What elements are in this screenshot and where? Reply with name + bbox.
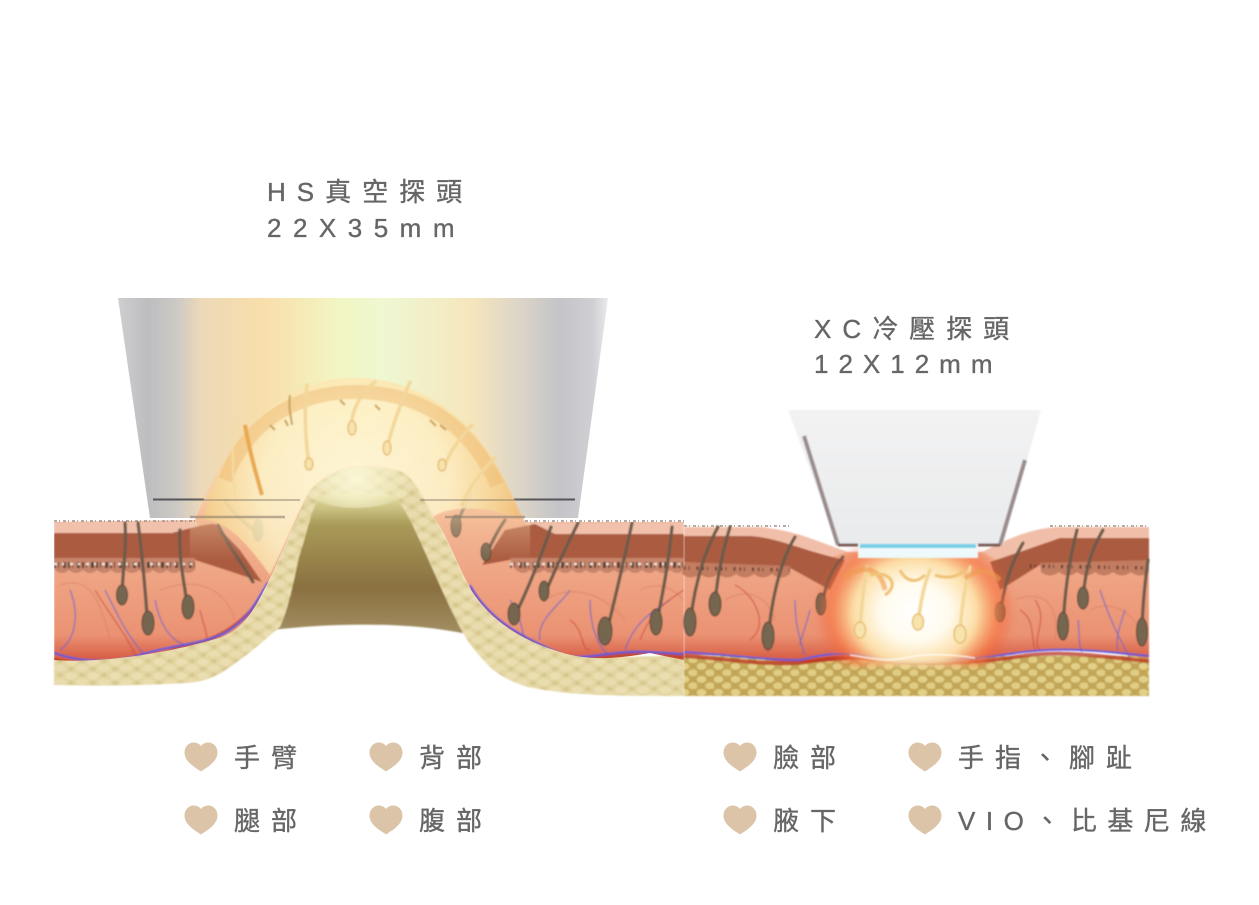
heading: HS vacuum probe: HS真空探頭 xyxy=(267,177,473,207)
XC cold probe body xyxy=(788,410,1041,558)
probe rim lines over translucent dome feet xyxy=(190,500,525,517)
bullet: arm: 手臂 xyxy=(234,743,308,773)
brown pigment band right xyxy=(684,536,1149,590)
bullet: abdomen: 腹部 xyxy=(419,806,493,836)
right fat layer xyxy=(684,656,1149,696)
bullet: underarm: 腋下 xyxy=(773,806,847,836)
melanin speckles right xyxy=(684,566,1149,570)
melanin speckle band xyxy=(54,562,684,568)
heading: HS vacuum probe xyxy=(267,177,473,243)
follicles right xyxy=(684,527,1148,650)
rete ridges with speckle band xyxy=(54,558,684,573)
heading: XC cold-compression probe: XC冷壓探頭 xyxy=(814,314,1020,344)
epidermis xyxy=(54,520,684,536)
HS vacuum probe body xyxy=(118,298,608,518)
main artery and vein right xyxy=(684,654,1149,663)
right skin section xyxy=(682,527,1149,696)
heading: HS vacuum probe: 22X35mm xyxy=(267,213,466,243)
bullet: face xyxy=(724,742,847,773)
dome of suctioned tissue, translucent and lit xyxy=(203,378,521,575)
bullets: HS probe areas xyxy=(184,742,493,836)
bullet: underarm xyxy=(724,806,847,836)
left skin section xyxy=(54,378,684,668)
rete ridges right xyxy=(682,560,1149,578)
left fat strip xyxy=(54,465,684,696)
heading: XC cold-compression probe: 12X12mm xyxy=(814,349,1002,379)
bullet: VIO and bikini line: VIO、比基尼線 xyxy=(958,801,1217,838)
bullet: arm xyxy=(184,742,308,773)
main vein and artery left xyxy=(54,495,684,664)
dermis base right xyxy=(684,527,1149,663)
bullet: abdomen xyxy=(370,806,493,836)
dermis base xyxy=(54,452,684,661)
lit hairs inside dome xyxy=(233,382,495,505)
blood vessels right xyxy=(795,590,1130,658)
bullet: legs: 腿部 xyxy=(234,806,308,836)
blood vessels left xyxy=(60,590,670,655)
follicles left xyxy=(116,495,672,645)
bullet: face: 臉部 xyxy=(773,743,847,773)
bullet: back: 背部 xyxy=(419,743,493,773)
left fat layer and suction cavity xyxy=(54,448,684,696)
epidermis right xyxy=(684,527,1149,560)
skin surface speckle xyxy=(54,521,1149,526)
bullet: back xyxy=(370,742,493,773)
lit top of fat arch xyxy=(296,448,416,508)
suction cavity shadow xyxy=(272,490,475,636)
brown pigment band xyxy=(54,524,684,582)
dome light wash xyxy=(190,378,530,560)
dome pigment arc xyxy=(225,392,497,485)
bullet: legs xyxy=(184,806,308,836)
lit hairs under right probe xyxy=(845,567,1000,660)
cooling tip xyxy=(860,544,976,548)
bullet: fingers and toes: 手指、腳趾 xyxy=(958,738,1143,775)
heading: XC cold-compression probe xyxy=(814,314,1020,379)
light glow in right skin xyxy=(810,548,1020,666)
dermis lobes right xyxy=(725,594,1140,640)
bullets: XC probe areas xyxy=(724,738,1217,838)
dermis lobes xyxy=(60,582,683,621)
